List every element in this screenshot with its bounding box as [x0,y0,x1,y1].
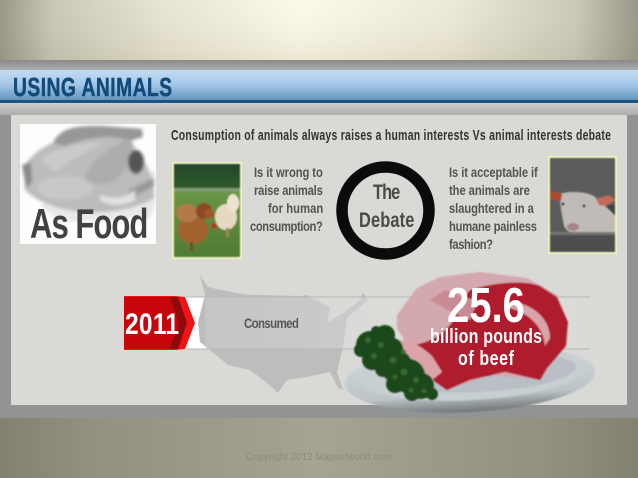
slide background [0,60,638,418]
title bar [0,70,638,103]
icon: roast chicken [22,126,155,222]
text: question left [250,165,323,234]
heading: debate: Consumption of animals always raises a human interests Vs animal interests debate [171,127,611,143]
label: consumed: Consumed [244,315,299,331]
text: question right: humane painless [449,219,537,234]
arrow: red year tag [124,296,195,350]
map: united states [198,275,368,393]
text: question left: raise animals [254,183,323,198]
stat label: billion pounds [430,325,542,347]
copyright: Copyright 2012 Mapsofworld.com [246,452,392,463]
banner: consumed 2011 [124,296,590,350]
white strip behind map [180,297,210,349]
text: question left: Is it wrong to [254,165,323,180]
label: as food: As Food [30,200,148,247]
title: USING ANIMALS [13,72,172,102]
icon: parsley [354,325,438,401]
photo: hens [172,162,242,259]
the debate circle: Debate [359,208,414,231]
bottom beige band [0,418,638,478]
stat number: 25.6 [447,278,525,333]
plate of beef: of beef [458,347,515,369]
icon: hens [176,194,239,251]
text: question left: for human [268,201,323,216]
text: question left: consumption? [250,219,323,234]
top beige band [0,0,638,60]
photo: lamb [548,156,617,254]
icon: beef roast [393,272,568,390]
text: question right: slaughtered in a [449,201,535,216]
plate of beef [343,272,597,418]
text: question right: Is it acceptable if [449,165,538,180]
the debate circle: The [373,180,400,203]
icon: lamb [550,191,615,233]
text: question right: the animals are [449,183,530,198]
plate [343,338,597,418]
panel: as food illustration [20,124,156,247]
year: 2011 [125,307,179,341]
main panel [11,115,627,405]
text: question right: fashion? [449,237,493,252]
text: question right [449,165,538,252]
the debate circle [342,167,429,254]
